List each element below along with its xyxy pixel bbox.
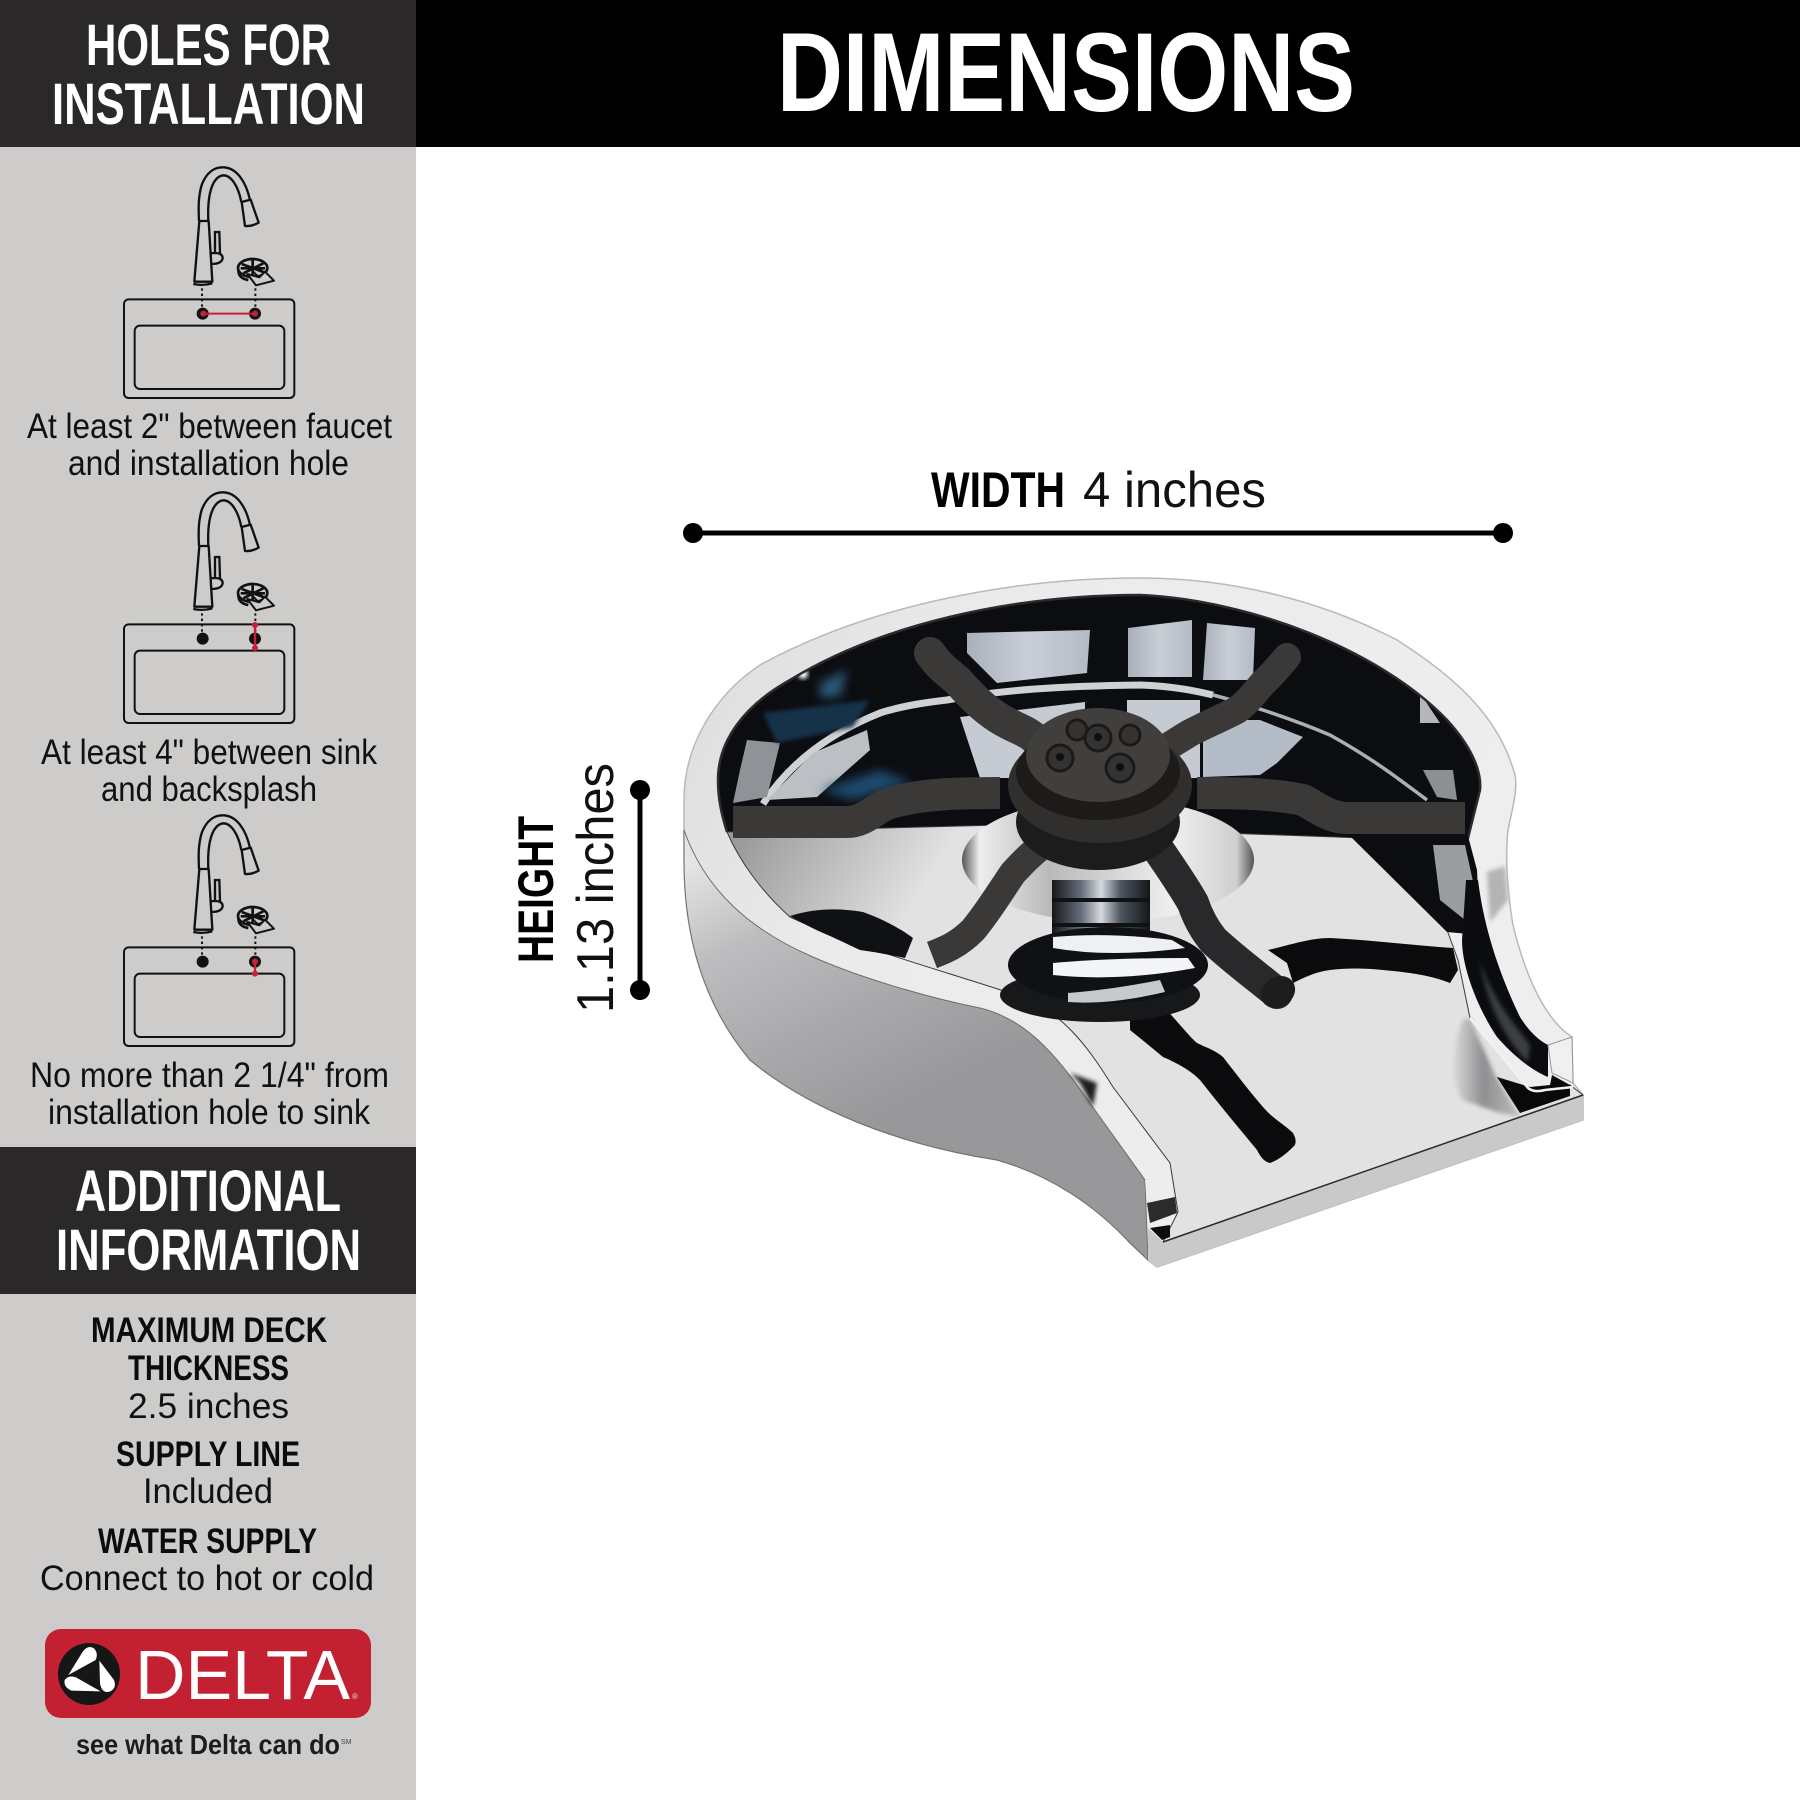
heading panel: holes for installation [0,0,416,147]
text: maximum deck thickness [91,1311,327,1426]
heading panel: holes for installation: INSTALLATION [52,72,365,137]
front lip [1148,1095,1583,1267]
text: maximum deck thickness: MAXIMUM DECK [91,1311,327,1350]
text: supply line: SUPPLY LINE [116,1435,300,1474]
bowl interior [719,596,1479,838]
width dimension line [683,523,1513,543]
heading panel: holes for installation: HOLES FOR [86,13,331,78]
left rail end [1145,1168,1172,1207]
text: supply line [116,1435,300,1511]
base dome [962,798,1254,922]
floor reflections of arms [790,909,913,958]
rim and outer silhouette [684,578,1583,1267]
text: faucet spacing: At least 2" between faucet [27,407,392,446]
right bowl shadow [1350,836,1480,935]
height dimension line [630,780,650,1000]
product: glass rinser [684,578,1583,1267]
text: backsplash spacing: At least 4" between sink [41,733,377,772]
text: supply line: Included [143,1472,273,1511]
rail foot reflection [1497,1075,1570,1113]
icon: faucet and sink, hole to sink [124,815,294,1046]
text: water supply: Connect to hot or cold [40,1559,374,1598]
text: faucet spacing [27,407,392,483]
logo: delta: DELTA [135,1636,350,1714]
floor plate [727,825,1583,1242]
tagline: see what Delta can do [76,1729,340,1760]
right rail shading [1487,866,1508,922]
arm end face [1255,969,1301,1015]
lower chrome ribs [1008,927,1208,1003]
rail front end block [1548,1037,1573,1083]
spray arms [733,653,1465,993]
icon: faucet and sink, sink to backsplash [124,492,294,723]
right rail inner channel [1462,880,1548,1077]
title banner: dimensions [416,0,1800,147]
text: hole to sink [30,1056,389,1132]
opening edge line [718,595,1480,842]
text: maximum deck thickness: THICKNESS [128,1349,289,1388]
hub [1016,774,1180,870]
icon: faucet and sink, hole spacing [124,167,294,398]
text: backsplash spacing [41,733,377,809]
text: maximum deck thickness: 2.5 inches [128,1387,289,1426]
stem [1052,880,1150,940]
title banner: dimensions: DIMENSIONS [777,10,1355,135]
text: hole to sink: installation hole to sink [48,1093,370,1132]
width dimension label: 4 inches [1083,462,1266,518]
text: water supply [40,1522,374,1598]
nozzles [1047,720,1140,782]
text: faucet spacing: and installation hole [68,444,349,483]
outer wall [684,830,1148,1260]
logo: delta [45,1629,371,1718]
width dimension label: WIDTH [931,462,1065,518]
heading panel: additional information: ADDITIONAL [75,1159,341,1224]
heading panel: additional information: INFORMATION [56,1218,361,1283]
heading panel: additional information [0,1147,416,1294]
base shadow [1000,968,1200,1022]
text: hole to sink: No more than 2 1/4" from [30,1056,389,1095]
width dimension label [931,462,1266,518]
logo: delta: ® [352,1692,358,1701]
height dimension label: HEIGHT [508,816,564,963]
text: water supply: WATER SUPPLY [98,1522,317,1561]
floor shadow blob [1454,1018,1520,1117]
text: backsplash spacing: and backsplash [101,770,317,809]
rim notch reflection [1070,1073,1097,1107]
tagline: SM [341,1739,352,1746]
panel: left sidebar [0,0,416,1800]
height dimension label [508,763,625,1013]
height dimension label: 1.13 inches [567,763,625,1013]
